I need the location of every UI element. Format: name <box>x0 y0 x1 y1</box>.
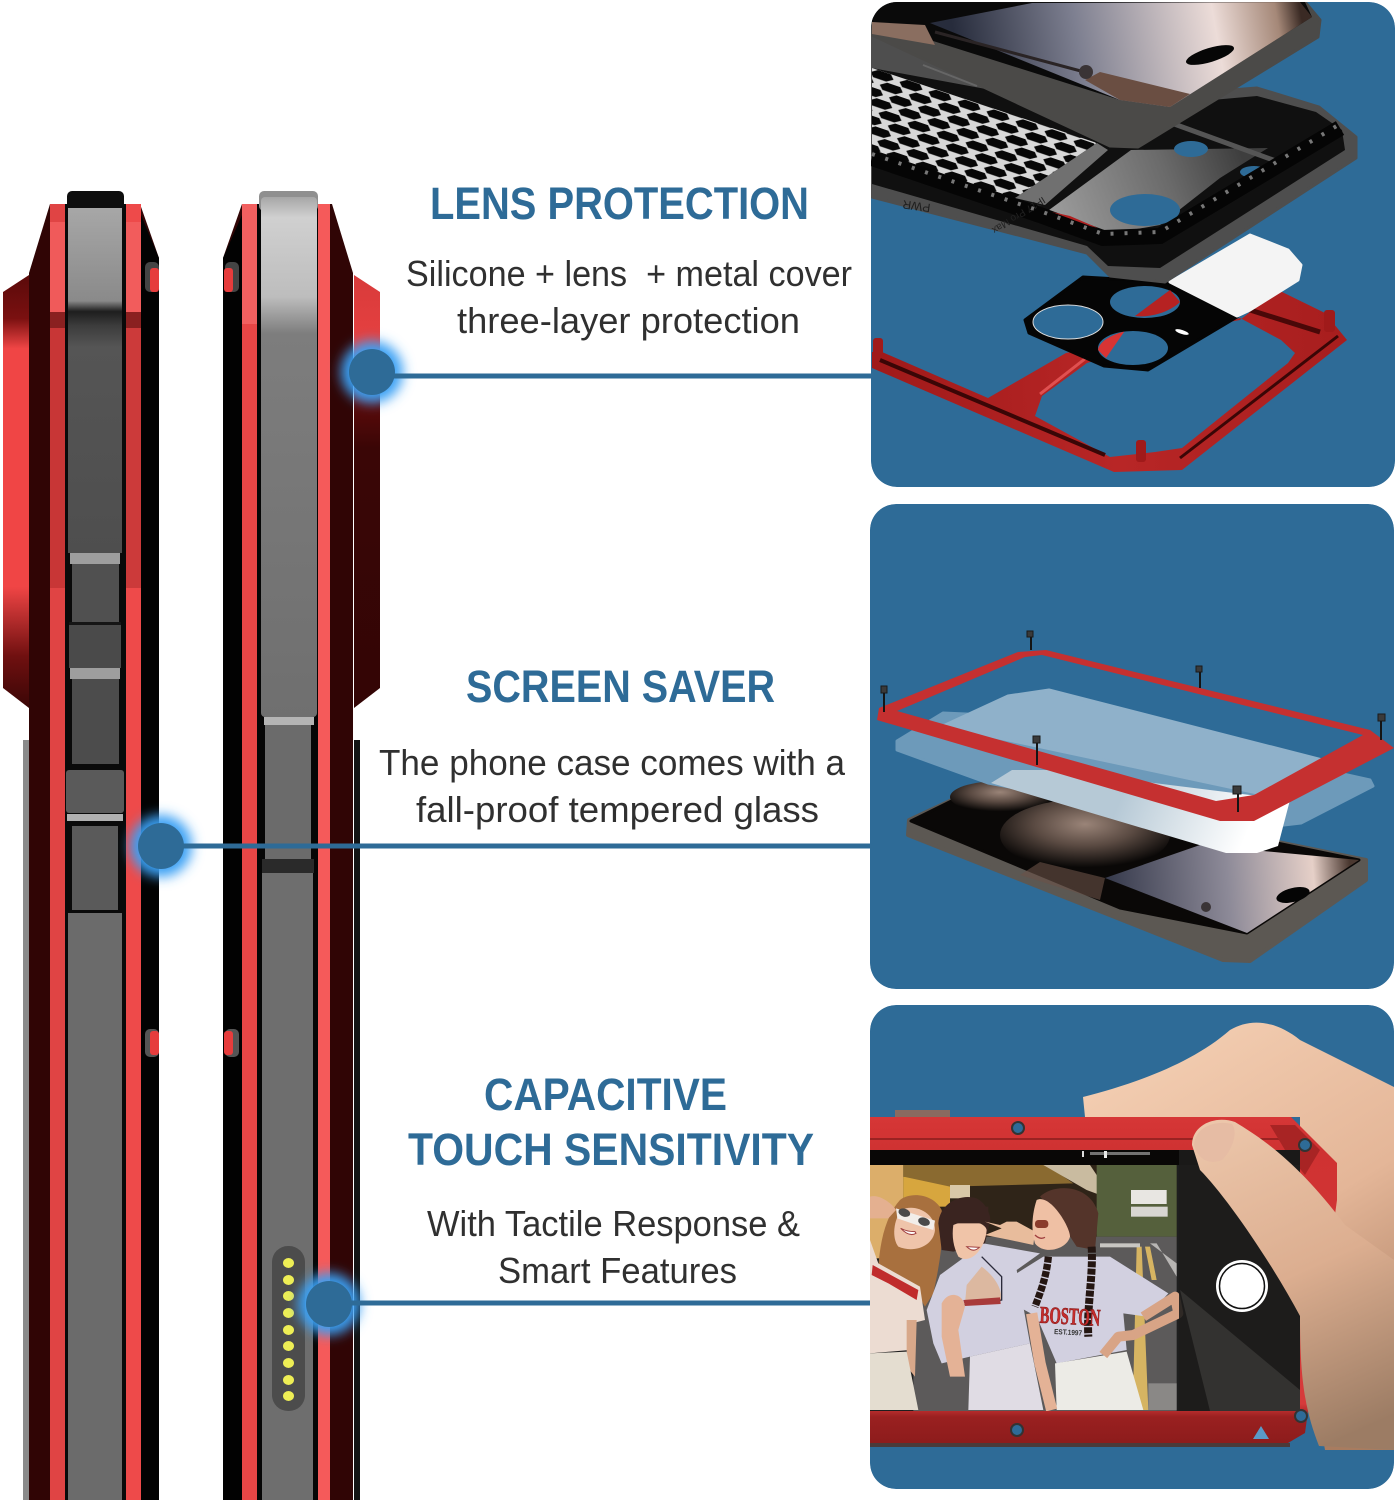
phone <box>908 781 1366 961</box>
silicone case <box>872 28 1356 282</box>
callout: screen saver marker and line <box>130 815 870 877</box>
text block: screen saver: fall-proof tempered glass <box>416 789 819 830</box>
text block: screen saver: SCREEN SAVER <box>466 661 775 712</box>
thumb <box>1192 1120 1394 1450</box>
phone side view: left <box>3 191 159 1500</box>
panel: lens protection <box>871 2 1395 487</box>
text block: lens protection <box>406 178 852 341</box>
rear glass layer <box>897 713 1373 830</box>
panel: capacitive touch <box>870 1005 1394 1489</box>
callout: touch sensitivity marker and line <box>298 1273 870 1335</box>
text block: screen saver: The phone case comes with a <box>379 742 846 783</box>
case labels <box>903 197 1046 233</box>
text block: capacitive touch sensitivity: Smart Features <box>498 1250 737 1291</box>
icon: screws <box>1011 1122 1311 1436</box>
panel: screen saver <box>870 504 1394 989</box>
red metal back frame <box>872 290 1347 472</box>
text block: capacitive touch sensitivity <box>408 1069 814 1291</box>
phone case <box>870 1110 1337 1447</box>
girl right <box>1017 1257 1168 1363</box>
icon: triangle mark <box>1253 1426 1269 1439</box>
text block: lens protection: three-layer protection <box>457 300 800 341</box>
case labels: PWR <box>901 197 931 215</box>
icon: left upper screw <box>145 262 159 292</box>
phone with screen <box>872 2 1320 147</box>
camera ticks <box>1082 1151 1150 1158</box>
red frame <box>877 631 1394 821</box>
text block: lens protection: LENS PROTECTION <box>430 178 809 229</box>
text block: capacitive touch sensitivity: TOUCH SENSITIVITY <box>408 1124 814 1175</box>
photo scene: EST.1997 <box>1054 1327 1082 1337</box>
lens metal plate <box>1025 235 1301 370</box>
callout: lens protection marker and line <box>341 341 872 403</box>
shirt text: BOSTON <box>1039 1303 1101 1332</box>
text block: capacitive touch sensitivity: CAPACITIVE <box>484 1069 727 1120</box>
girl middle <box>927 1243 1040 1363</box>
thumb nail <box>1194 1123 1234 1146</box>
photo scene <box>870 1150 1184 1411</box>
tempered glass <box>943 690 1334 800</box>
text block: capacitive touch sensitivity: With Tactile Response & <box>427 1203 800 1244</box>
screen photo <box>870 1150 1300 1413</box>
text block: lens protection: Silicone + lens + metal cover <box>406 253 852 294</box>
phone side view: right <box>223 191 380 1500</box>
icon: shutter button <box>1216 1260 1268 1312</box>
case labels: IP17 Pro Max <box>990 194 1047 235</box>
icon: left lower screw <box>145 1029 159 1057</box>
icon: right upper screw <box>224 262 239 292</box>
text block: screen saver <box>379 661 846 830</box>
hand fingers <box>1083 1023 1394 1450</box>
icon: pogo pin connector <box>272 1246 305 1411</box>
girl left <box>878 1195 943 1307</box>
icon: right lower screw <box>224 1029 239 1057</box>
